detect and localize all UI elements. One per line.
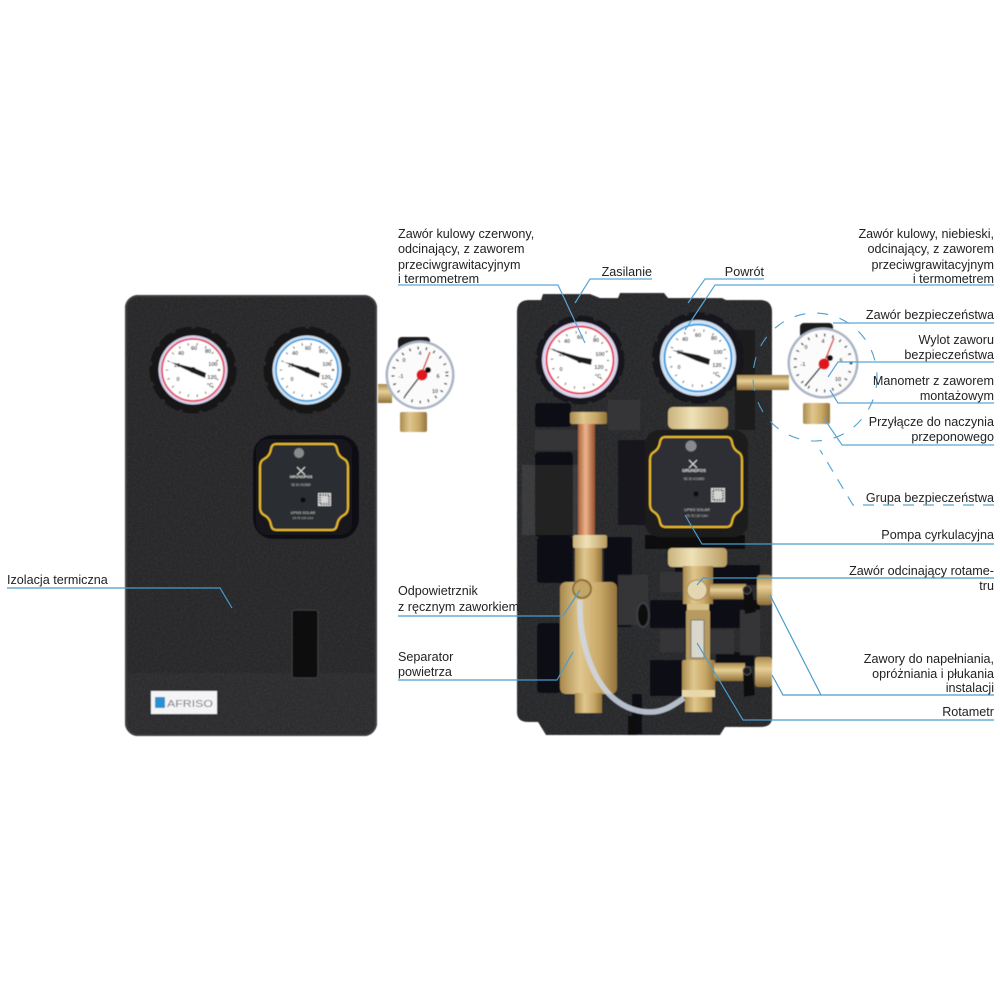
callout: blue ball valve: i termometrem bbox=[913, 272, 994, 286]
callout: circulation pump bbox=[685, 515, 994, 544]
callout: safety valve outlet: Wylot zaworu bbox=[919, 333, 994, 347]
callout: air vent: Odpowietrznik bbox=[398, 584, 478, 598]
callout: return bbox=[688, 265, 764, 303]
pump head, cover: UPM3 SOLAR bbox=[291, 511, 315, 515]
insulation cover bbox=[125, 295, 377, 736]
safety group on cover: 0 bbox=[402, 358, 406, 364]
callout: rotameter: Rotametr bbox=[942, 705, 994, 719]
callout: expansion vessel connection: przeponowego bbox=[911, 430, 994, 444]
gauge: supply ball valve: 80 bbox=[593, 338, 599, 344]
panel: open unit with insulation foam bbox=[517, 293, 858, 735]
callout: thermal insulation: Izolacja termiczna bbox=[7, 573, 108, 587]
callout: air vent bbox=[398, 584, 580, 616]
callout: rotameter shut-off valve: tru bbox=[979, 579, 994, 593]
safety group, open unit: 0 bbox=[804, 345, 808, 351]
brass connection nut and stem bbox=[668, 407, 728, 429]
callout: red ball valve bbox=[398, 227, 585, 343]
callout: rotameter shut-off valve: Zawór odcinający rotame- bbox=[849, 564, 994, 578]
pump, open unit: 98 30 410880 bbox=[684, 477, 704, 481]
flow assembly with rotameter bbox=[668, 548, 772, 712]
gauge: supply ball valve: 20 bbox=[559, 352, 565, 358]
brand label AFRISO bbox=[151, 691, 217, 714]
safety group, open unit: 4 bbox=[821, 339, 825, 345]
pump window bbox=[253, 435, 359, 539]
dashed outline: safety group bbox=[753, 313, 877, 441]
callout: safety group: Grupa bezpieczeństwa bbox=[866, 491, 994, 505]
gauge: supply thermometer, cover: 100 bbox=[208, 362, 218, 368]
callout: air separator: Separator bbox=[398, 650, 453, 664]
pump, open unit bbox=[645, 430, 748, 537]
callout: blue ball valve: Zawór kulowy, niebieski, bbox=[858, 227, 994, 241]
gauge: return ball valve: 40 bbox=[682, 337, 688, 343]
callout: safety valve outlet: bezpieczeństwa bbox=[904, 348, 994, 362]
callout: fill and flush valves: Zawory do napełniania, bbox=[864, 652, 994, 666]
foam lighter blocks bbox=[535, 400, 760, 655]
callout: pressure gauge: Manometr z zaworem bbox=[873, 374, 994, 388]
gauge: return thermometer, cover: 60 bbox=[305, 346, 311, 352]
callout: safety group bbox=[820, 450, 994, 505]
safety group on cover: 4 bbox=[418, 351, 422, 357]
watermark bbox=[522, 465, 578, 535]
callout: air separator: powietrza bbox=[398, 665, 452, 679]
gauge: supply thermometer, cover: °C bbox=[207, 383, 213, 389]
gauge: return ball valve: °C bbox=[713, 372, 719, 378]
safety group on cover: -1 bbox=[399, 374, 403, 380]
brand label AFRISO: AFRISO bbox=[167, 698, 213, 710]
foam back shell bbox=[517, 293, 772, 735]
gauge: supply thermometer, cover: 0 bbox=[176, 377, 180, 383]
safety group on cover: 10 bbox=[432, 389, 438, 395]
callout: blue ball valve: przeciwgrawitacyjnym bbox=[872, 258, 994, 272]
callout: expansion vessel connection: Przyłącze do naczynia bbox=[869, 415, 994, 429]
gauge: supply ball valve bbox=[537, 317, 623, 403]
callout: red ball valve: i termometrem bbox=[398, 272, 479, 286]
air separator bbox=[560, 535, 617, 713]
gauge: return ball valve: 0 bbox=[677, 365, 681, 371]
callout: supply: Zasilanie bbox=[602, 265, 652, 279]
callout: blue ball valve: odcinający, z zaworem bbox=[868, 242, 994, 256]
gauge: return thermometer, cover: 0 bbox=[290, 377, 294, 383]
callout: red ball valve: przeciwgrawitacyjnym bbox=[398, 258, 520, 272]
gauge: supply ball valve: °C bbox=[595, 374, 601, 380]
safety group on cover bbox=[378, 337, 454, 432]
callout: thermal insulation bbox=[7, 573, 232, 608]
gauge: return ball valve: 20 bbox=[677, 350, 683, 356]
gauge: supply ball valve: 0 bbox=[559, 367, 563, 373]
pump, open unit: 25-75 130 CAH bbox=[686, 514, 709, 518]
callout: air separator bbox=[398, 650, 573, 680]
pump head, cover: GRUNDFOS bbox=[290, 474, 313, 479]
gauge: return thermometer, cover: °C bbox=[321, 383, 327, 389]
panel: insulated closed unit bbox=[125, 295, 454, 736]
gauge: supply thermometer, cover: 120 bbox=[207, 375, 217, 381]
callout: air vent: z ręcznym zaworkiem bbox=[398, 600, 519, 614]
callout: blue ball valve bbox=[685, 227, 994, 330]
gauge: return ball valve: 80 bbox=[711, 336, 717, 342]
safety group on cover: 6 bbox=[436, 374, 440, 380]
gauge: return ball valve bbox=[654, 314, 742, 402]
callout: pressure gauge bbox=[830, 374, 994, 403]
callout: pressure gauge: montażowym bbox=[920, 389, 994, 403]
safety group, open unit bbox=[737, 323, 858, 424]
pump head, cover: 25-75 130 CAH bbox=[293, 516, 313, 520]
callout: fill and flush valves: opróżniania i płukania bbox=[872, 667, 994, 681]
gauge: supply thermometer, cover: 20 bbox=[174, 363, 180, 369]
foam oval slot bbox=[637, 603, 649, 627]
callout: red ball valve: odcinający, z zaworem bbox=[398, 242, 524, 256]
gauge: return ball valve: 120 bbox=[712, 363, 722, 369]
gauge: return ball valve: 60 bbox=[695, 333, 701, 339]
gauge: supply ball valve: 120 bbox=[594, 365, 604, 371]
gauge: return ball valve: 100 bbox=[713, 350, 723, 356]
gauge: return thermometer, cover: 120 bbox=[321, 375, 331, 381]
rotameter window bbox=[292, 610, 318, 678]
safety group, open unit: 6 bbox=[839, 358, 843, 364]
callout: fill and flush valves bbox=[770, 595, 994, 695]
callout: safety valve: Zawór bezpieczeństwa bbox=[866, 308, 994, 322]
gauge: supply ball valve: 100 bbox=[595, 352, 605, 358]
pump, open unit: GRUNDFOS bbox=[682, 468, 706, 473]
gauge: return thermometer, cover: 40 bbox=[292, 351, 298, 357]
gauge: return thermometer, cover: 100 bbox=[322, 362, 332, 368]
gauge: supply thermometer, cover: 60 bbox=[191, 346, 197, 352]
callout: red ball valve: Zawór kulowy czerwony, bbox=[398, 227, 534, 241]
callout: return: Powrót bbox=[725, 265, 764, 279]
gauge: supply thermometer, cover: 40 bbox=[178, 351, 184, 357]
pump head, cover bbox=[256, 439, 352, 535]
pump head, cover: 98 30 410880 bbox=[291, 483, 311, 487]
callout: fill and flush valves: instalacji bbox=[946, 681, 994, 695]
gauge: supply ball valve: 40 bbox=[564, 339, 570, 345]
pump, open unit: UPM3 SOLAR bbox=[684, 507, 710, 512]
gauge: supply thermometer, cover: 80 bbox=[205, 349, 211, 355]
callout: circulation pump: Pompa cyrkulacyjna bbox=[881, 528, 994, 542]
callout: expansion vessel connection bbox=[823, 415, 994, 445]
gauge: supply ball valve: 60 bbox=[577, 335, 583, 341]
gauge: return thermometer, cover: 80 bbox=[319, 349, 325, 355]
foam inner cavities bbox=[535, 330, 760, 735]
gauge: supply thermometer, cover bbox=[151, 328, 235, 412]
callout: supply bbox=[575, 265, 652, 303]
callout: safety valve outlet bbox=[828, 333, 994, 377]
gauge: return thermometer, cover bbox=[265, 328, 349, 412]
callout: rotameter bbox=[697, 643, 994, 720]
air vent hose bbox=[580, 600, 684, 712]
safety group, open unit: -1 bbox=[801, 362, 805, 368]
copper supply pipe bbox=[570, 412, 607, 538]
gauge: return thermometer, cover: 20 bbox=[288, 363, 294, 369]
callout: rotameter shut-off valve bbox=[697, 564, 994, 593]
safety group, open unit: 10 bbox=[835, 377, 841, 383]
